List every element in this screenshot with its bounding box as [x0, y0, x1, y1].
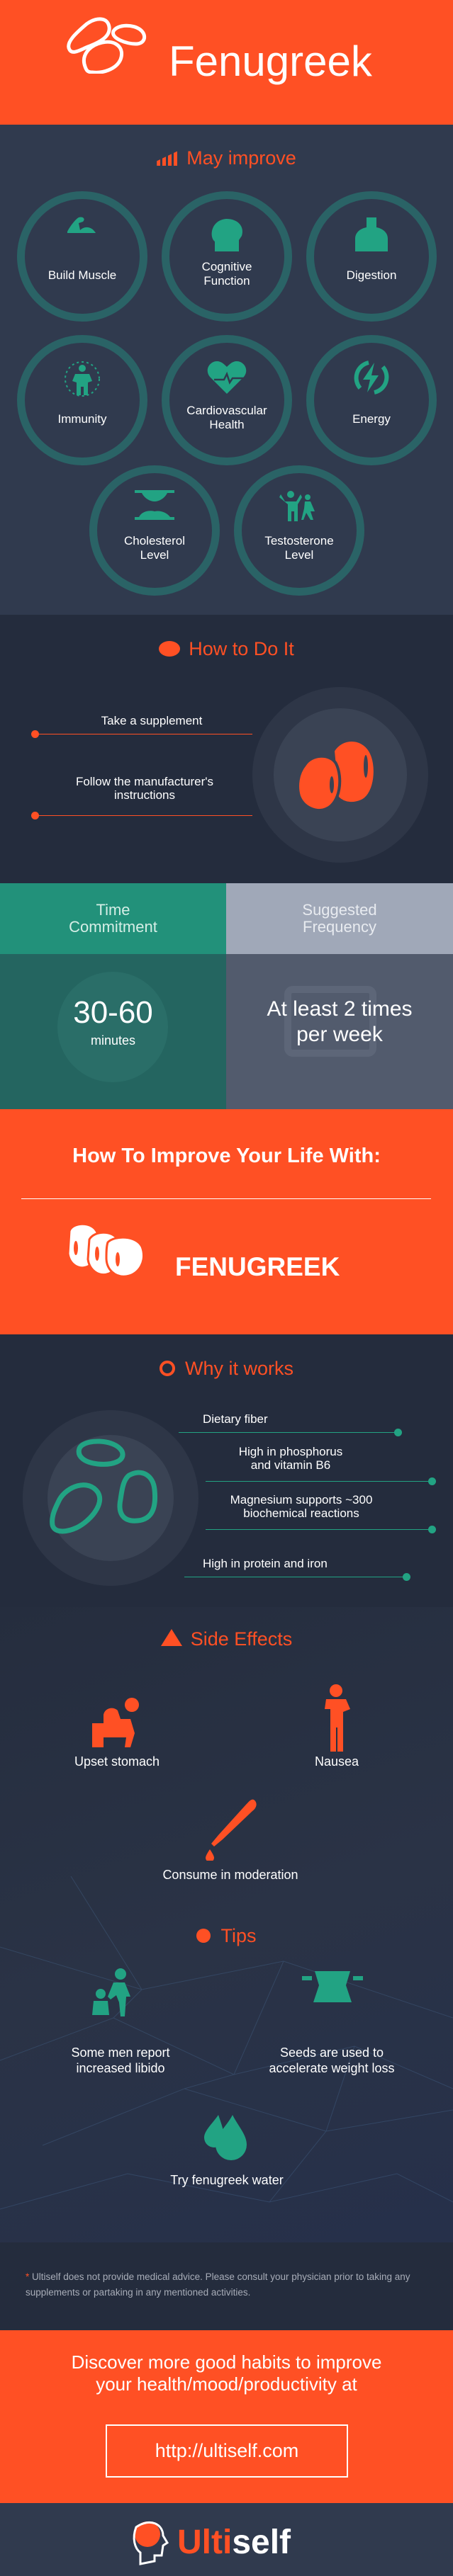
step: follow instructions: instructions — [114, 788, 175, 802]
title: Fenugreek — [169, 38, 372, 85]
step: take a supplement: Take a supplement — [101, 714, 202, 727]
circle: energy: Energy — [352, 412, 391, 426]
panel: suggested frequency: Frequency — [303, 918, 376, 936]
circle: cardiovascular health — [162, 335, 292, 465]
heading: may improve: May improve — [186, 147, 296, 169]
fact: phosphorus — [206, 1445, 436, 1485]
circle: testosterone level: Testosterone — [264, 534, 334, 547]
circle: cognitive function: Function — [203, 274, 250, 288]
panel: side effects and tips — [0, 1607, 453, 2242]
fact: magnesium — [206, 1493, 436, 1533]
disclaimer: * Ultiself does not provide medical advice. Please consult your physician prior to taking any supplements or partaking in any mentioned activities. — [26, 2271, 410, 2298]
tip: weight loss — [269, 1971, 395, 2075]
icon: seeds — [69, 1225, 142, 1276]
step: follow instructions — [31, 775, 252, 819]
panel: may improve — [0, 125, 453, 615]
circle: testosterone level — [234, 465, 364, 596]
panel: time commitment — [0, 883, 226, 1109]
heading: tips: Tips — [220, 1925, 257, 1946]
tip: libido: Some men report — [71, 2046, 170, 2060]
circle: build muscle — [17, 191, 147, 322]
icon: brain head — [133, 2521, 169, 2565]
circle: immunity — [17, 335, 147, 465]
panel: why it works — [0, 1334, 453, 1607]
tip: fenugreek water — [170, 2115, 284, 2187]
heading: side effects: Side Effects — [191, 1628, 292, 1650]
fact: protein: High in protein and iron — [203, 1557, 328, 1570]
header — [0, 0, 453, 125]
panel: time commitment: Time — [96, 901, 130, 919]
icon: seeds outline — [67, 17, 146, 74]
heading: tips — [196, 1925, 257, 1946]
graphic: seeds circle — [23, 1410, 198, 1586]
text: discover more: your health/mood/productivity at — [96, 2373, 357, 2395]
tip: fenugreek water: Try fenugreek water — [170, 2173, 284, 2187]
heading: why it works: Why it works — [185, 1358, 293, 1379]
fact: magnesium: biochemical reactions — [243, 1507, 359, 1520]
call to action — [0, 2330, 453, 2503]
circle: build muscle: Build Muscle — [48, 268, 116, 282]
circle: cholesterol level: Cholesterol — [124, 534, 185, 547]
text: ultiself: Ultiself — [177, 2524, 291, 2561]
item: consume in moderation — [162, 1799, 298, 1882]
fact: phosphorus: and vitamin B6 — [251, 1458, 330, 1472]
circle: cardiovascular health: Cardiovascular — [186, 404, 267, 417]
heading: how to improve: How To Improve Your Life With: — [72, 1145, 381, 1167]
footer: logo — [0, 2503, 453, 2576]
item: nausea — [315, 1684, 359, 1769]
fact: dietary fiber: Dietary fiber — [203, 1412, 268, 1426]
item: upset stomach: Upset stomach — [74, 1754, 160, 1769]
circle: cardiovascular health: Health — [209, 418, 245, 431]
circle: cognitive function — [162, 191, 292, 322]
circle: digestion: Digestion — [347, 268, 396, 282]
fact: protein — [184, 1557, 410, 1581]
item: nausea: Nausea — [315, 1754, 359, 1769]
tip: libido — [71, 1968, 170, 2075]
banner: how to improve — [0, 1109, 453, 1334]
circle: cholesterol level — [89, 465, 220, 596]
text: fenugreek: FENUGREEK — [175, 1252, 340, 1281]
fact: dietary fiber — [179, 1412, 402, 1436]
panel: how to do it — [0, 615, 453, 883]
url box — [106, 2424, 348, 2478]
panel: suggested frequency — [226, 883, 453, 1109]
step: follow instructions: Follow the manufacturer's — [76, 775, 213, 788]
panel: time commitment: 30-60 — [73, 995, 153, 1030]
tip: weight loss: accelerate weight loss — [269, 2061, 395, 2075]
step: take a supplement — [31, 714, 252, 738]
circle: energy — [306, 335, 437, 465]
circle: immunity: Immunity — [58, 412, 106, 426]
circle: cholesterol level: Level — [140, 548, 169, 562]
url box: http://ultiself.com — [155, 2440, 298, 2461]
panel: suggested frequency: per week — [296, 1023, 383, 1046]
graphic: seed circle — [252, 687, 428, 863]
tip: weight loss: Seeds are used to — [280, 2046, 384, 2060]
panel: suggested frequency: Suggested — [302, 901, 377, 919]
fact: phosphorus: High in phosphorus — [239, 1445, 342, 1458]
text: discover more: Discover more good habits to improve — [72, 2351, 381, 2373]
circle: cognitive function: Cognitive — [202, 260, 252, 273]
circle: testosterone level: Level — [285, 548, 313, 562]
panel: time commitment: Commitment — [69, 918, 157, 936]
heading: how to do it: How to Do It — [189, 638, 294, 659]
panel: suggested frequency: At least 2 times — [267, 997, 413, 1021]
tip: libido: increased libido — [76, 2061, 165, 2075]
text: discover more — [72, 2351, 381, 2395]
panel: time commitment: minutes — [91, 1033, 135, 1048]
item: upset stomach — [74, 1698, 160, 1769]
circle: digestion — [306, 191, 437, 322]
fact: magnesium: Magnesium supports ~300 — [230, 1493, 372, 1507]
item: consume in moderation: Consume in moderation — [162, 1868, 298, 1882]
